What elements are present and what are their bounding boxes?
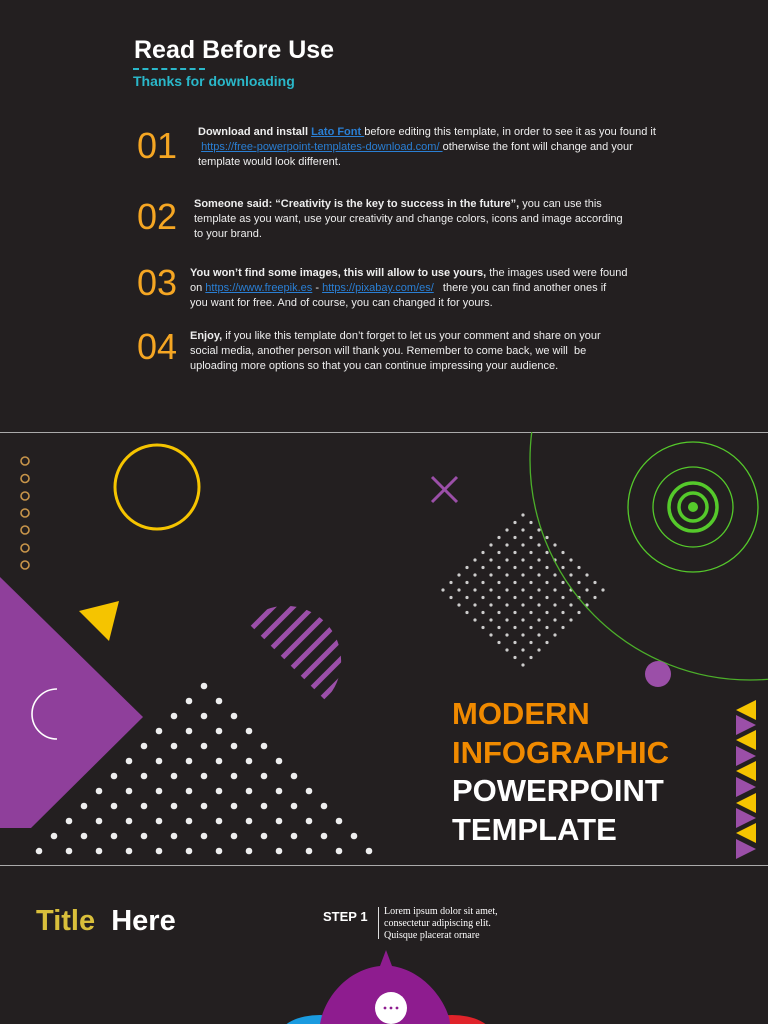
step 1 label: Lorem ipsum dolor sit amet,	[384, 906, 498, 917]
step 03	[137, 262, 628, 309]
icon: small circles column	[21, 457, 29, 569]
dotted diamond	[436, 508, 612, 677]
cover title	[452, 696, 669, 846]
slide title: Title Here	[36, 905, 176, 937]
purple triangle	[0, 577, 143, 828]
step 03: on https://www.freepik.es - https://pixabay.com/es/ there you can find another ones if	[190, 282, 606, 294]
step 03: You won’t find some images, this will allow to use yours, the images used were found	[190, 267, 628, 279]
cover title: TEMPLATE	[452, 812, 617, 846]
yellow triangle	[79, 601, 119, 641]
step 04: Enjoy, if you like this template don’t forget to let us your comment and share on your	[190, 330, 601, 342]
subtitle: Thanks for downloading	[133, 73, 295, 89]
step 1 label: Quisque placerat ornare	[384, 930, 480, 941]
step 01	[137, 125, 656, 168]
green orbit	[530, 240, 768, 680]
icon: target	[628, 442, 758, 572]
diagram	[286, 950, 486, 1024]
step 02	[137, 196, 623, 240]
cover title: POWERPOINT	[452, 773, 664, 808]
cover title: INFOGRAPHIC	[452, 734, 669, 770]
dotted triangle	[26, 678, 384, 860]
step 04	[137, 326, 601, 372]
step 01: 01	[137, 125, 177, 166]
step 03: you want for free. And of course, you can changed it for yours.	[190, 297, 493, 309]
step 1 label	[323, 906, 498, 941]
step 1 label: STEP 1	[323, 909, 368, 924]
title: Read Before Use	[134, 36, 334, 64]
step 03: 03	[137, 262, 177, 303]
yellow ring	[115, 445, 199, 529]
step 01: template would look different.	[198, 156, 341, 168]
step 02: to your brand.	[194, 228, 262, 240]
step 04: social media, another person will thank you. Remember to come back, we will be	[190, 345, 586, 357]
step 04: 04	[137, 326, 177, 367]
step 1 label: consectetur adipiscing elit.	[384, 918, 491, 929]
step 01: https://free-powerpoint-templates-download.com/ otherwise the font will change and your	[201, 141, 633, 153]
purple dot	[645, 661, 671, 687]
striped half circle	[250, 606, 342, 700]
step 02: template as you want, use your creativity and change colors, icons and image according	[194, 213, 623, 225]
triangle strip	[736, 700, 756, 859]
step 04: uploading more options so that you can continue impressing your audience.	[190, 360, 558, 372]
step 01: Download and install Lato Font before editing this template, in order to see it as you found it	[198, 126, 656, 138]
panel: cover slide	[0, 432, 768, 866]
icon: purple X	[432, 477, 457, 502]
cover title: MODERN	[452, 696, 590, 731]
step 02: Someone said: “Creativity is the key to success in the future”, you can use this	[194, 198, 602, 210]
step 02: 02	[137, 196, 177, 237]
